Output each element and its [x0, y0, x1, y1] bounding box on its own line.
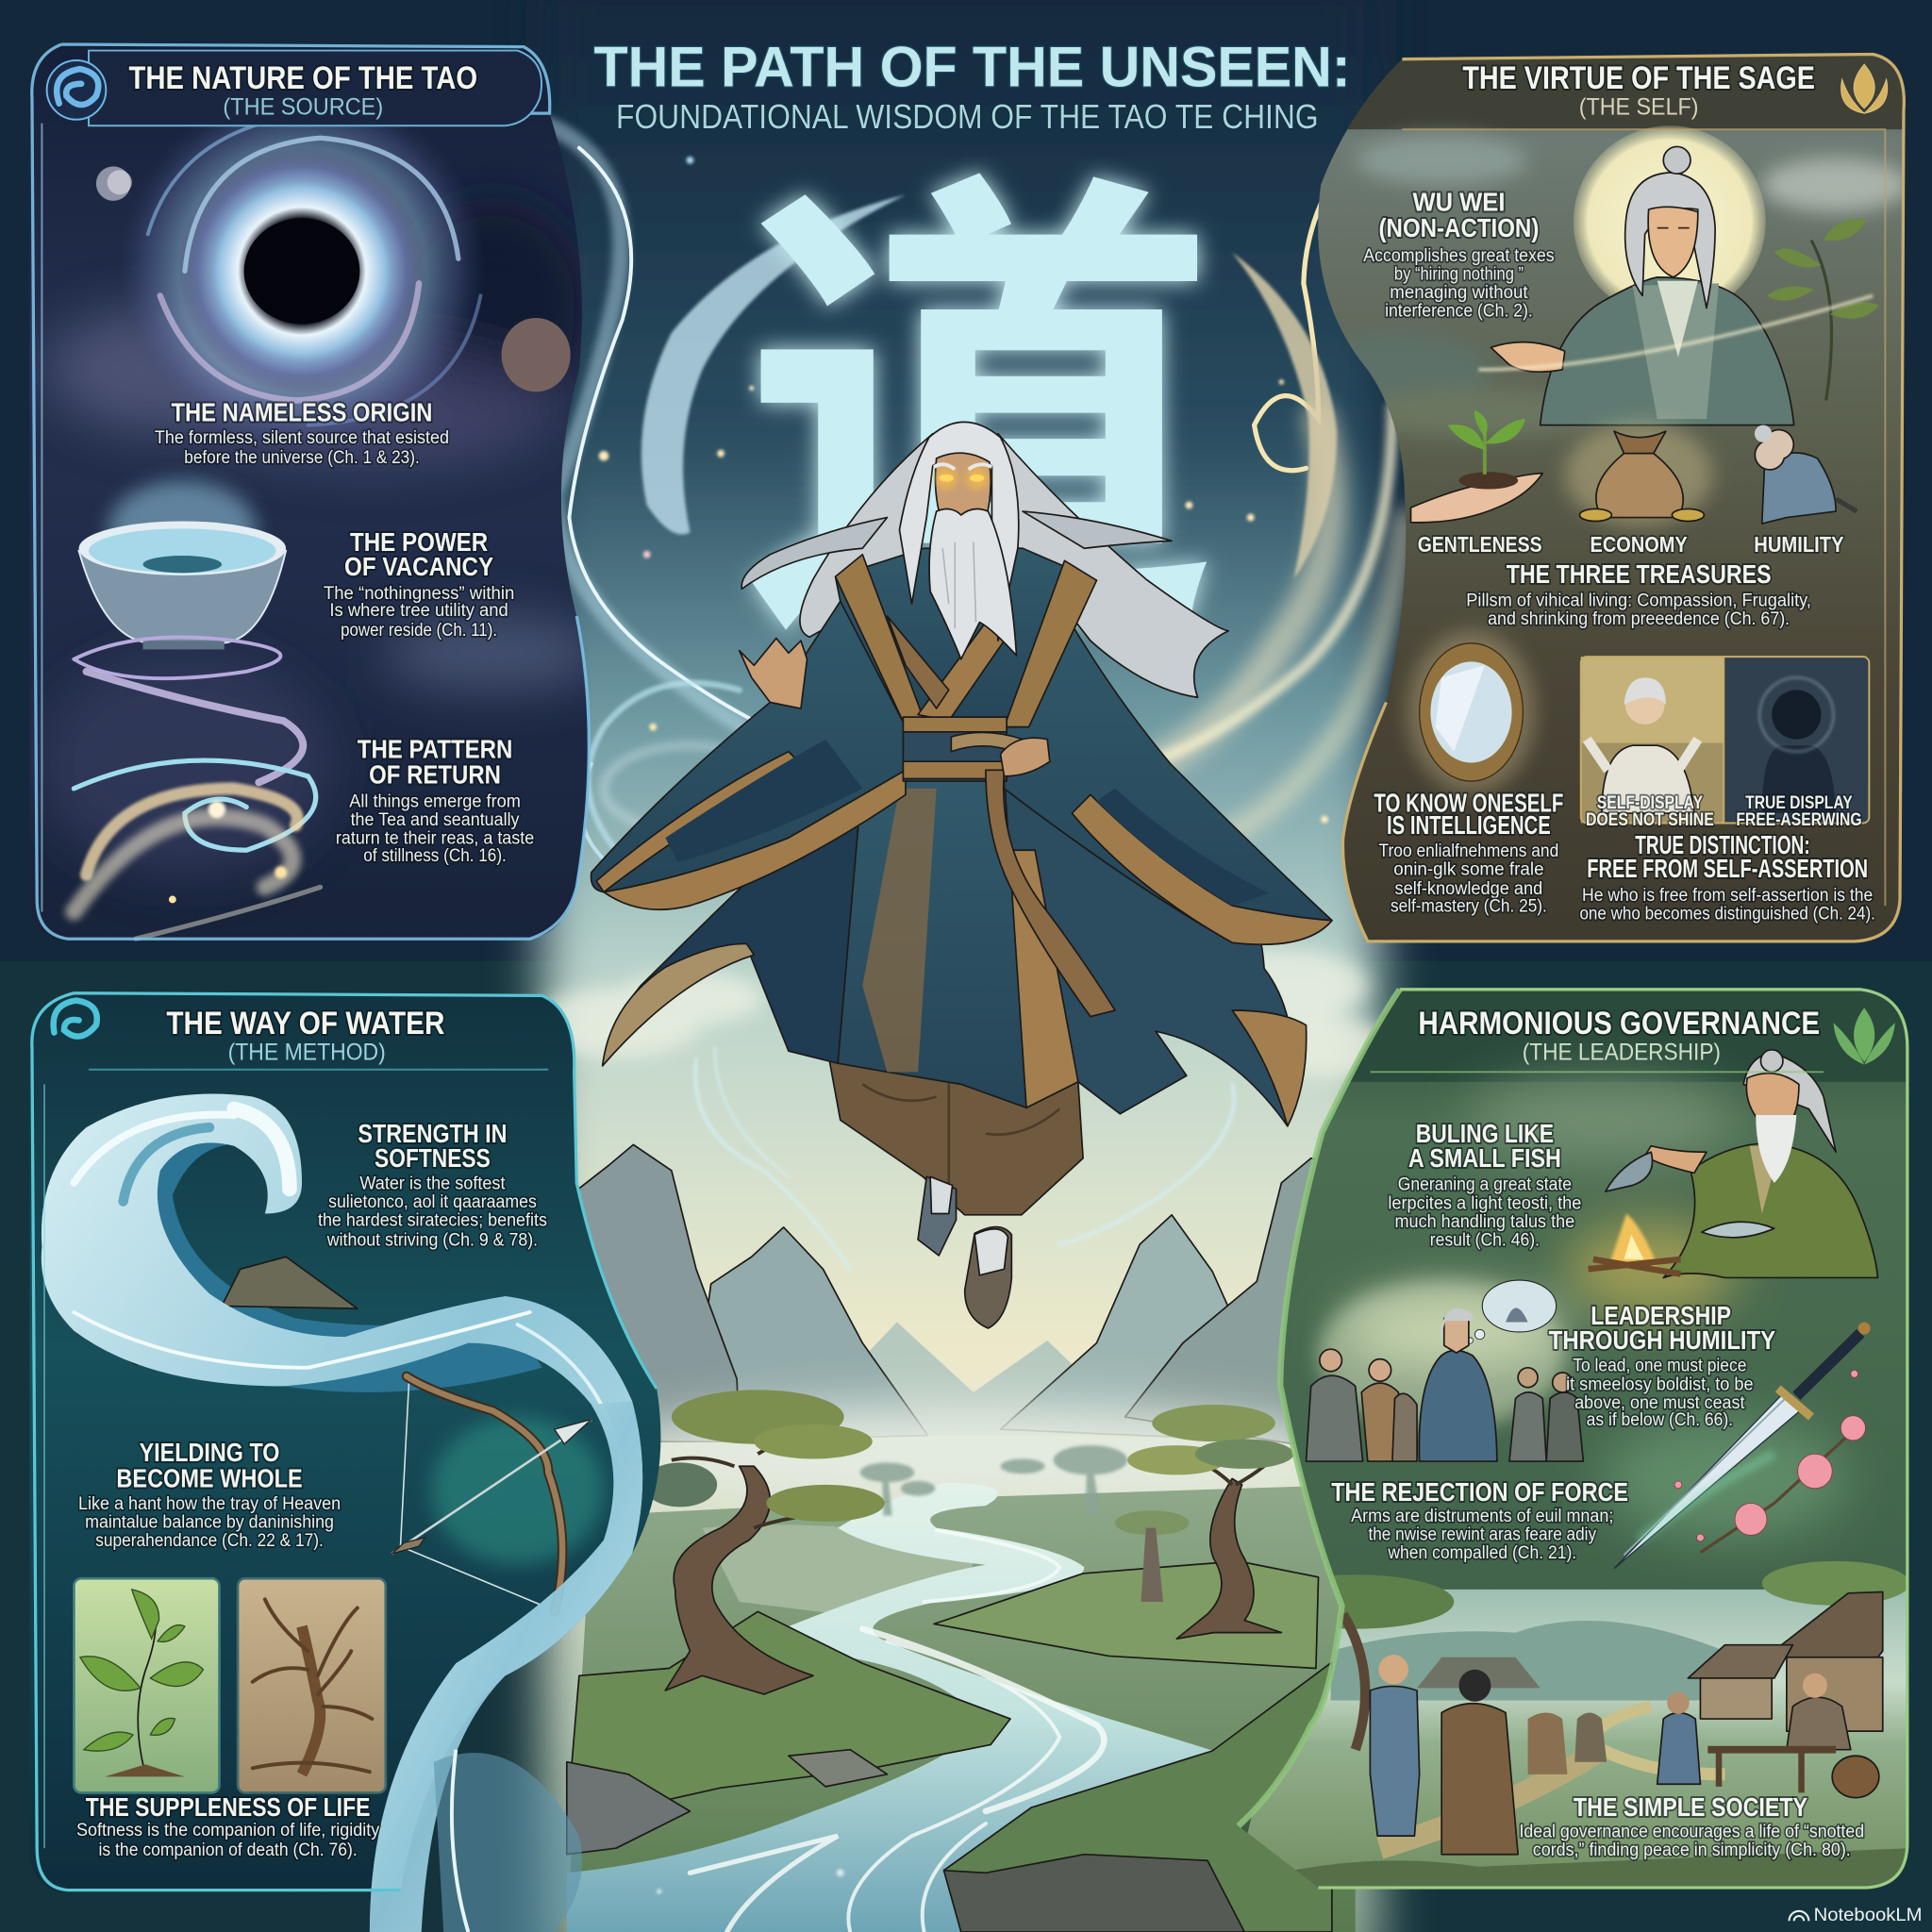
left outer robe [603, 752, 918, 1066]
text: the simple society: cords,” finding peace in simplicity (Ch. 80). [1533, 1840, 1851, 1860]
cosmic vortex [128, 126, 483, 440]
front hair [899, 422, 1019, 641]
clouds behind the sage [530, 949, 1392, 1077]
text: yielding to become whole: Like a hant how the tray of Heaven [78, 1494, 341, 1514]
frame [1342, 54, 1904, 941]
header shade [1232, 986, 1923, 1082]
label: true display: TRUE DISPLAY [1745, 792, 1853, 813]
text: the rejection of force: THE REJECTION OF FORCE [1331, 1477, 1628, 1507]
label: true display [1736, 792, 1862, 830]
card: dead tree [238, 1578, 386, 1792]
label: true display: FREE-ASERWING [1736, 809, 1862, 830]
text: leadership through humility: it smeelosy boldist, to be [1566, 1374, 1754, 1394]
label: self-display: SELF-DISPLAY [1597, 792, 1703, 813]
text: leadership through humility: To lead, one must piece [1573, 1357, 1746, 1376]
brown villager [1441, 1704, 1518, 1855]
text: yielding to become whole: maintalue balance by daninishing [85, 1513, 334, 1533]
NotebookLM logo: NotebookLM [1814, 1905, 1923, 1925]
far land haze [702, 1524, 974, 1614]
text: wu wei: WU WEI [1412, 187, 1505, 216]
mid right bank [934, 1561, 1319, 1668]
basket [1832, 1756, 1879, 1798]
text: the pattern of return: THE PATTERN [358, 734, 512, 763]
left cliffs and peak [571, 1144, 928, 1441]
centre robe [838, 776, 1026, 1108]
text: boiling like a small fish: lerpcites a light teosti, the [1388, 1193, 1581, 1213]
text: wu wei: interference (Ch. 2). [1385, 302, 1533, 322]
icon: hand with sprout [1411, 410, 1542, 523]
text: wu wei: by “hiring nothing ” [1394, 264, 1524, 284]
distant figures [1528, 1713, 1567, 1774]
second house [1688, 1645, 1792, 1678]
path [1595, 1707, 1725, 1774]
right cliffs and peak [1001, 1158, 1356, 1454]
right shoe [965, 1227, 1011, 1328]
text: the nameless origin [155, 398, 449, 468]
text: to know oneself: self-mastery (Ch. 25). [1391, 897, 1547, 917]
text: leadership through humility: as if below (Ch. 66). [1587, 1410, 1733, 1430]
lower right bank [943, 1662, 1332, 1932]
title: THE PATH OF THE UNSEEN: [594, 35, 1351, 98]
central sage figure [591, 422, 1332, 1328]
right hand [1001, 738, 1050, 776]
blue villager [1370, 1686, 1420, 1836]
left pine tree [643, 1390, 885, 1694]
text: to know oneself: IS INTELLIGENCE [1387, 810, 1551, 840]
text: leadership through humility: LEADERSHIP [1591, 1301, 1731, 1330]
text: to know oneself [1374, 789, 1563, 917]
text: boiling like a small fish [1388, 1119, 1581, 1250]
valley mist [604, 1405, 1343, 1503]
brush arc right of the character [1232, 253, 1337, 579]
title [594, 35, 1351, 136]
land [567, 1485, 1356, 1932]
text: the pattern of return: of stillness (Ch. 16). [363, 846, 507, 866]
text: strength in softness: sulietonco, aol it qaaraames [328, 1192, 537, 1212]
text: yielding to become whole: BECOME WHOLE [116, 1463, 303, 1492]
text: the rejection of force: Arms are distruments of euil mnan; [1351, 1507, 1613, 1526]
left flowing energy swirl [542, 124, 813, 887]
moon [1574, 125, 1766, 296]
icon: green lotus [1834, 1008, 1895, 1064]
elder cooking fish [1589, 1050, 1878, 1277]
river sparkles [657, 1869, 844, 1894]
sword with blossoms [1614, 1322, 1871, 1569]
icon: money bag [1565, 423, 1713, 526]
tea plant [1767, 219, 1879, 400]
river [567, 1482, 1269, 1932]
heading: THE NATURE OF THE TAO [128, 60, 477, 96]
text: strength in softness: STRENGTH IN [358, 1119, 507, 1148]
far mountains [789, 1322, 1146, 1436]
nebula clouds [37, 197, 604, 874]
villagers [1306, 1349, 1583, 1461]
small moon [96, 166, 130, 201]
text: the three treasures: THE THREE TREASURES [1507, 559, 1772, 589]
text: boiling like a small fish: much handling talus the [1395, 1212, 1574, 1232]
text: the suppleness of life [76, 1792, 380, 1860]
rock in wave [63, 1265, 198, 1364]
left bank rocks [567, 1750, 887, 1855]
text: the three treasures [1466, 559, 1811, 629]
text: to know oneself: TO KNOW ONESELF [1374, 789, 1563, 818]
text: leadership through humility [1549, 1301, 1775, 1430]
text: leadership through humility: above, one must ceast [1574, 1393, 1745, 1413]
icon: swirl [47, 60, 106, 120]
face [935, 453, 991, 537]
right outer robe [998, 740, 1293, 1126]
text: boiling like a small fish: Gneraning a great state [1398, 1175, 1572, 1195]
text: the three treasures: Pillsm of vihical living: Compassion, Frugality, [1466, 591, 1811, 611]
text: the simple society: Ideal governance encourages a life of “snotted [1519, 1822, 1864, 1841]
text: yielding to become whole [78, 1438, 341, 1551]
left sleeve [591, 601, 906, 892]
text: wu wei: Accomplishes great texes [1363, 246, 1555, 266]
text: wu wei: menaging without [1390, 283, 1528, 303]
misty scene glow [1343, 1078, 1848, 1541]
label: gentleness: GENTLENESS [1418, 532, 1542, 557]
glowing eyes [934, 464, 991, 490]
panel: the nature of the Tao [25, 37, 616, 949]
label: humility: HUMILITY [1754, 532, 1844, 557]
text: boiling like a small fish: A SMALL FISH [1408, 1143, 1561, 1173]
wave foam lines [74, 1109, 623, 1466]
text: strength in softness: SOFTNESS [375, 1143, 491, 1173]
tree canopy [1257, 1574, 1454, 1629]
text: the pattern of return: raturn te their reas, a taste [336, 829, 534, 849]
label: self-display: DOES NOT SHINE [1586, 809, 1714, 830]
text: boiling like a small fish: result (Ch. 46). [1430, 1230, 1540, 1250]
floating sparks [599, 157, 1328, 823]
sage of virtue [1478, 146, 1873, 425]
belt [903, 717, 1115, 1017]
back rock [222, 1257, 358, 1308]
text: true distinction: TRUE DISTINCTION: [1635, 830, 1810, 859]
planet [502, 318, 571, 391]
text: leadership through humility: THROUGH HUMILITY [1549, 1325, 1775, 1355]
left bank [567, 1611, 1010, 1824]
text: the nameless origin: THE NAMELESS ORIGIN [172, 398, 432, 427]
crashing wave [42, 1094, 642, 1932]
landscape: mountains, valley and river [567, 1144, 1356, 1932]
panel: harmonious governance [1232, 986, 1923, 1897]
icon: bowing figure [1755, 425, 1857, 524]
text: the rejection of force: when compalled (Ch. 21). [1387, 1543, 1576, 1563]
text: the rejection of force [1331, 1477, 1628, 1563]
text: wu wei: (NON-ACTION) [1379, 213, 1539, 242]
text: the rejection of force: the nwise rewint aras feare adiy [1368, 1525, 1597, 1545]
collar bands [836, 555, 926, 727]
text: true distinction: He who is free from self-assertion is the [1582, 886, 1873, 906]
text: strength in softness: Water is the softest [359, 1174, 506, 1193]
text: the nameless origin: The formless, silent source that esisted [155, 428, 449, 448]
text: to know oneself: onin-glk some frale [1393, 859, 1544, 879]
trousers [822, 862, 1083, 1215]
clouds and hills [1293, 136, 1909, 438]
header band [1347, 56, 1903, 130]
subheading: (THE LEADERSHIP) [1523, 1040, 1721, 1065]
text: yielding to become whole: YIELDING TO [140, 1438, 279, 1467]
empty bowl [79, 480, 286, 649]
header bar [89, 51, 541, 125]
artisan and bench [1787, 1697, 1851, 1750]
text: the power of vacancy: THE POWER [350, 527, 488, 557]
back hair [741, 434, 1228, 697]
text: the pattern of return [336, 734, 534, 866]
text: the suppleness of life: Softness is the companion of life, rigidity [76, 1821, 380, 1840]
panel: the way of water [25, 986, 677, 1932]
river highlights [690, 1530, 1104, 1932]
bow and arrow [391, 1376, 604, 1611]
text: the suppleness of life: is the companion of death (Ch. 76). [98, 1840, 358, 1860]
heading: THE VIRTUE OF THE SAGE [1462, 60, 1815, 96]
humble leader [1419, 1308, 1497, 1461]
far huts [1417, 1657, 1541, 1688]
frame [32, 44, 589, 939]
woman [1657, 1713, 1700, 1784]
text: true distinction [1579, 830, 1875, 924]
torso [836, 548, 1096, 727]
panel: the virtue of the sage [1293, 49, 1923, 949]
right sleeve [1004, 604, 1332, 944]
wave interior [49, 1112, 542, 1392]
glowing Tao character: 道 [740, 27, 1220, 724]
text: yielding to become whole: superahendance (Ch. 22 & 17). [95, 1531, 324, 1551]
text: strength in softness: the hardest siratecies; benefits [318, 1211, 547, 1231]
text: the pattern of return: OF RETURN [369, 760, 501, 790]
foreground grass [1232, 1848, 1909, 1897]
icon: mirror [1407, 631, 1535, 793]
right flowing energy swirl [1084, 111, 1405, 838]
heading: HARMONIOUS GOVERNANCE [1418, 1006, 1820, 1041]
split card: self display [1581, 657, 1869, 823]
frame [32, 993, 657, 1890]
subheading: (THE SELF) [1579, 94, 1698, 120]
text: the simple society: THE SIMPLE SOCIETY [1574, 1792, 1807, 1822]
leader scene background [1319, 1281, 1565, 1429]
text: the suppleness of life: THE SUPPLENESS OF LIFE [86, 1792, 370, 1822]
spiral of return [74, 637, 321, 939]
village scene [1232, 1561, 1923, 1897]
label: economy: ECONOMY [1591, 532, 1688, 557]
beard [929, 509, 1017, 659]
far trees [860, 1445, 1127, 1516]
text: strength in softness [318, 1119, 547, 1250]
text: boiling like a small fish: BULING LIKE [1416, 1119, 1554, 1148]
text: the nameless origin: before the universe (Ch. 1 & 23). [184, 448, 420, 468]
right robe tan border [998, 850, 1307, 1126]
energy wisps under the robes [695, 1047, 1234, 1269]
text: the power of vacancy [324, 527, 514, 641]
text: the power of vacancy: power reside (Ch. 11). [341, 621, 497, 641]
thatched house [1766, 1592, 1883, 1663]
right pine tree [1115, 1405, 1293, 1639]
left shoe [918, 1176, 957, 1256]
frame [1319, 990, 1907, 1888]
text: true distinction: one who becomes distinguished (Ch. 24). [1579, 904, 1875, 924]
text: strength in softness: without striving (Ch. 9 & 78). [326, 1230, 538, 1250]
card: green plant [74, 1578, 219, 1792]
text: the pattern of return: the Tea and seantually [351, 810, 520, 830]
subheading: (THE METHOD) [228, 1040, 386, 1065]
text: the power of vacancy: OF VACANCY [344, 552, 493, 581]
text: the pattern of return: All things emerge from [349, 792, 521, 812]
icon: golden lotus [1840, 64, 1888, 113]
text: the simple society [1519, 1792, 1864, 1860]
text: the three treasures: and shrinking from preeedence (Ch. 67). [1488, 609, 1790, 629]
heading: THE WAY OF WATER [166, 1006, 445, 1041]
thought bubble [1467, 1280, 1557, 1343]
text: the power of vacancy: Is where tree utility and [329, 601, 508, 621]
text: to know oneself: self-knowledge and [1395, 879, 1542, 899]
water flowing past the frame [370, 1401, 642, 1932]
left hand [740, 639, 808, 708]
text: the power of vacancy: The “nothingness” within [324, 584, 514, 604]
brush arc left of the character [641, 194, 906, 534]
label: self-display [1586, 792, 1714, 830]
text: to know oneself: Troo enlialfnehmens and [1379, 841, 1558, 861]
subtitle: FOUNDATIONAL WISDOM OF THE TAO TE CHING [616, 97, 1319, 136]
text: wu wei [1363, 187, 1555, 322]
icon: water swirl [54, 1001, 97, 1037]
subheading: (THE SOURCE) [223, 94, 383, 120]
